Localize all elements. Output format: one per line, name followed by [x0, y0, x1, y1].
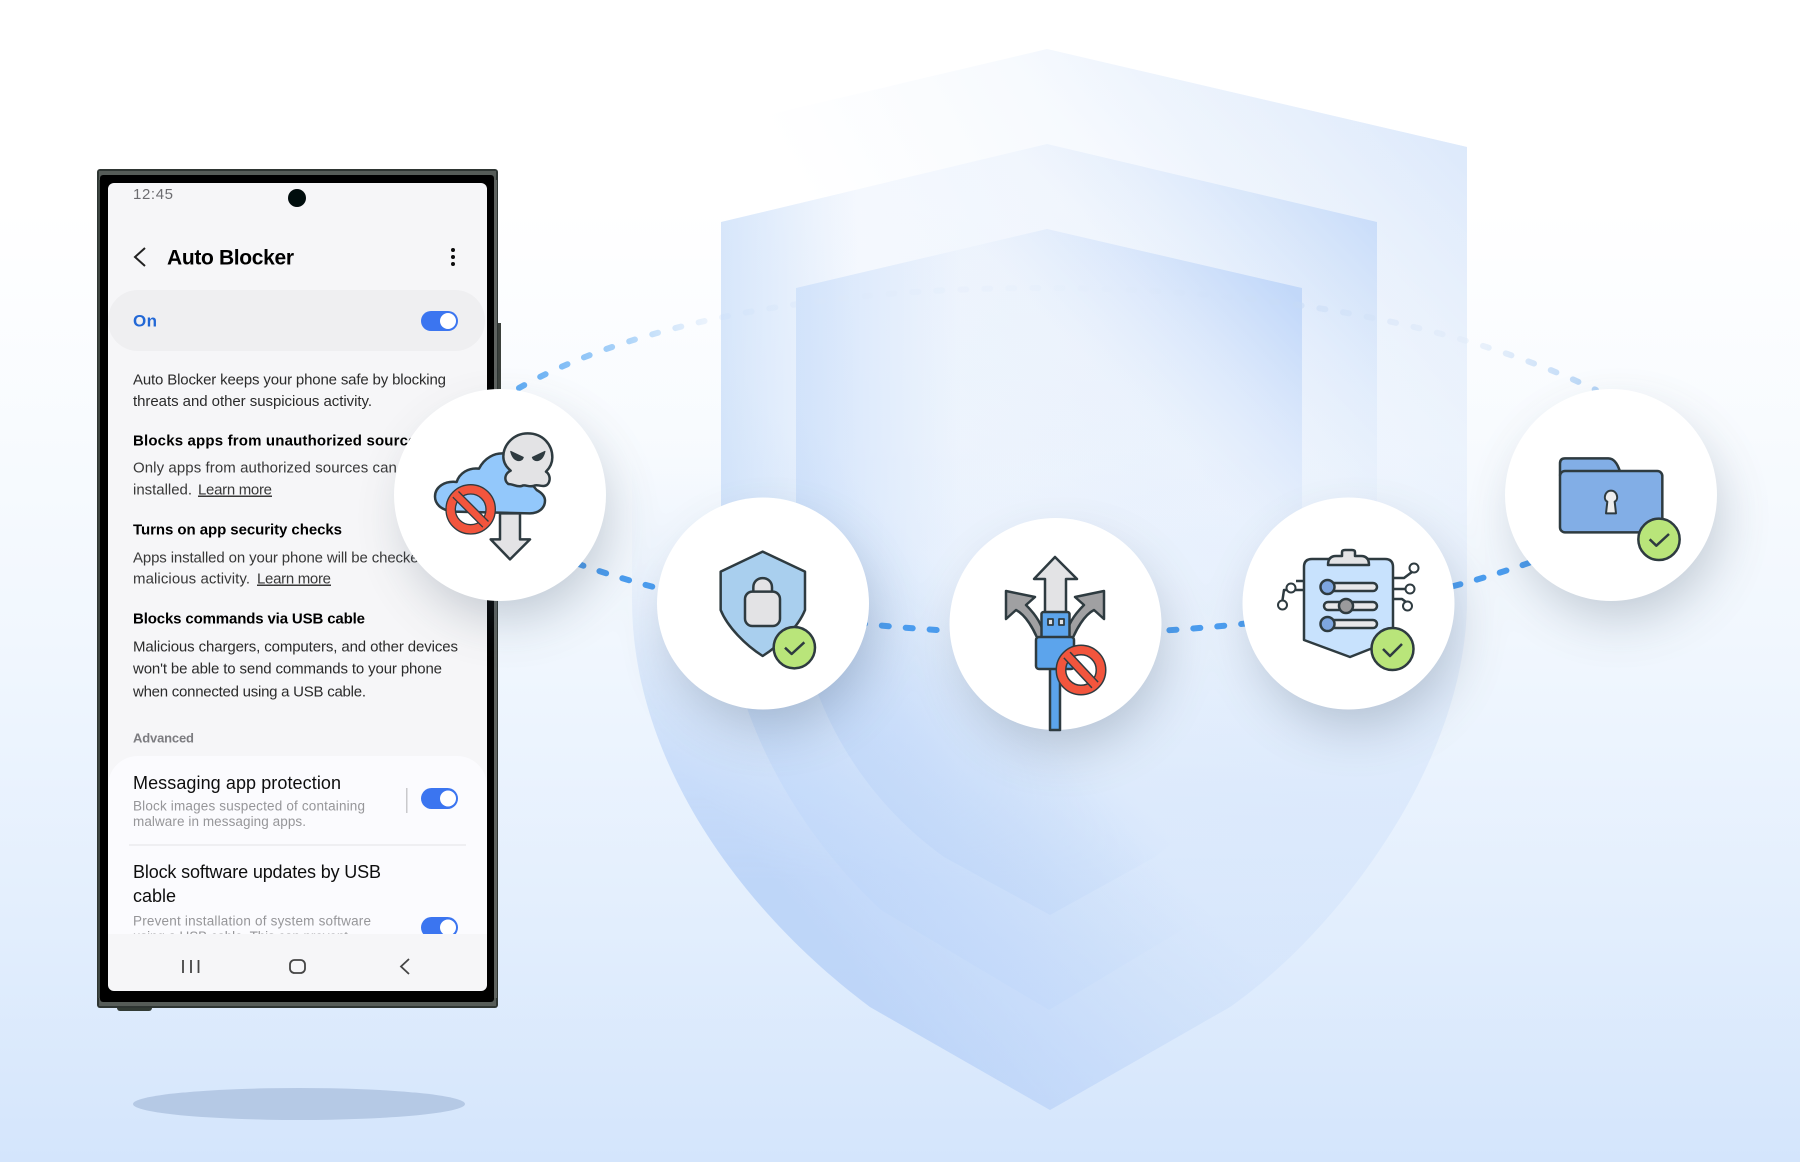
usb update option: Block software updates by USB [133, 862, 381, 882]
circle shadows [410, 420, 1717, 745]
middle shield [721, 144, 1377, 1010]
section: unauthorized sources: installed. [133, 482, 192, 498]
icon: usb with arrows [1006, 557, 1104, 730]
intro text: threats and other suspicious activity. [133, 393, 372, 410]
on row [108, 290, 485, 351]
section: security checks: Apps installed on your phone will be checked for [133, 550, 448, 566]
section: usb commands: when connected using a USB cable. [132, 684, 366, 700]
section: unauthorized sources: Blocks apps from unauthorized sources [133, 432, 425, 450]
section: security checks: malicious activity. [133, 570, 250, 588]
outer shield [632, 49, 1467, 1110]
section: unauthorized sources: Only apps from authorized sources can be [133, 460, 418, 476]
messaging option: Block images suspected of containing [133, 798, 365, 814]
messaging option: malware in messaging apps. [133, 814, 306, 829]
on label: On [133, 312, 157, 330]
section: unauthorized sources [134, 434, 411, 497]
phone [97, 169, 501, 1011]
section: usb commands: Malicious chargers, computers, and other devices [133, 638, 458, 656]
screen title: Auto Blocker [167, 246, 294, 270]
usb update option: Prevent installation of system software [133, 914, 371, 928]
section: usb commands: won't be able to send commands to your phone [132, 660, 442, 678]
navigation bar [183, 959, 409, 974]
usb update option [134, 864, 458, 934]
inner shield [796, 229, 1302, 915]
section: usb commands [132, 610, 458, 700]
icon: shield with lock [721, 552, 815, 668]
shield backdrop [632, 49, 1467, 1110]
circle: settings checklist [1242, 498, 1454, 710]
advanced label: Advanced [133, 730, 194, 746]
messaging option [133, 773, 458, 829]
phone frame [97, 169, 498, 1008]
bottom nub [117, 1004, 152, 1011]
toggle [421, 311, 458, 331]
section: usb commands: Blocks commands via USB cable [133, 610, 365, 628]
usb update option: cable [133, 886, 176, 906]
side button [497, 323, 501, 393]
icon: clipboard with sliders [1278, 550, 1418, 670]
circle: usb block [950, 518, 1162, 730]
status time: 12:45 [133, 186, 173, 203]
phone shadow [133, 1088, 465, 1120]
phone screen [108, 183, 487, 991]
advanced card [129, 776, 466, 934]
section: unauthorized sources: Learn more [198, 482, 272, 498]
section: security checks: Turns on app security checks [133, 522, 342, 538]
section: security checks [133, 524, 418, 586]
icon: cloud with skull [435, 433, 552, 559]
intro text [133, 372, 446, 410]
messaging option: Messaging app protection [133, 773, 341, 793]
section: security checks: Learn more [257, 570, 331, 588]
menu dots [451, 248, 455, 266]
dotted connector: upper arc [519, 288, 1596, 390]
icon: folder with keyhole [1560, 458, 1680, 560]
back chevron [135, 248, 145, 266]
circle: malicious cloud [394, 389, 606, 601]
camera [288, 189, 306, 207]
usb update option: using a USB cable. This can prevent [133, 929, 348, 944]
circle: locked shield [657, 498, 869, 710]
intro text: Auto Blocker keeps your phone safe by blocking [133, 372, 446, 388]
circle: locked folder [1505, 389, 1717, 601]
dotted connector: lower curve [560, 557, 1545, 634]
